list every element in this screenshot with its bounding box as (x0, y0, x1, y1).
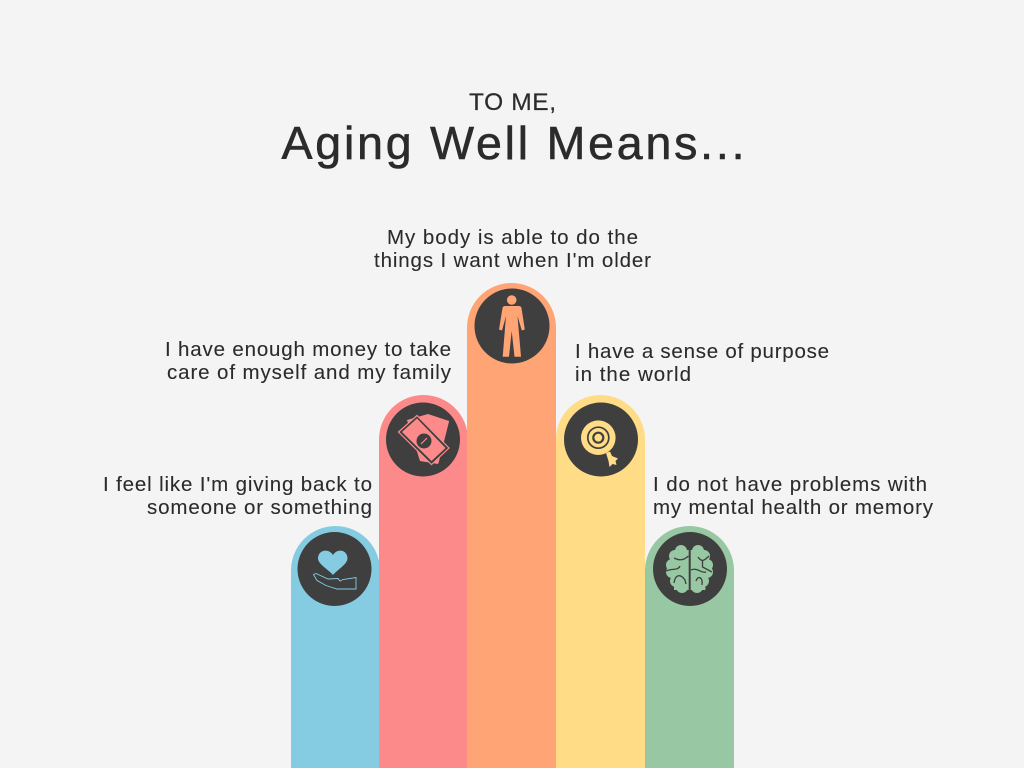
icon: banknotes (398, 414, 450, 465)
title: TO ME, (469, 89, 556, 116)
title: Aging Well Means... (282, 117, 744, 169)
text: giving back: I feel like I'm giving back to (103, 473, 372, 496)
icon: person (499, 295, 525, 357)
icon: target with arrow (581, 420, 618, 467)
text: giving back: someone or something (147, 496, 372, 519)
text: body: My body is able to do the (387, 226, 638, 249)
text: money (165, 338, 452, 384)
panel: purpose column (556, 395, 645, 768)
text: body: things I want when I'm older (374, 249, 651, 272)
text: money: care of myself and my family (167, 361, 452, 384)
text: mental health: I do not have problems with (653, 473, 927, 496)
text: mental health: my mental health or memory (653, 496, 934, 519)
panel: mental health column (645, 526, 734, 768)
text: money: I have enough money to take (165, 338, 451, 361)
text: giving back (103, 473, 372, 519)
text: mental health (653, 473, 934, 519)
title (282, 89, 744, 169)
text: body (374, 226, 651, 272)
icon: heart in hand (314, 551, 356, 589)
panel: money column (379, 395, 468, 768)
panel: giving back column (291, 526, 380, 768)
text: purpose: I have a sense of purpose (575, 340, 829, 363)
icon: brain (666, 545, 713, 593)
panel: body column (467, 283, 556, 768)
text: purpose (575, 340, 829, 386)
text: purpose: in the world (575, 363, 691, 386)
